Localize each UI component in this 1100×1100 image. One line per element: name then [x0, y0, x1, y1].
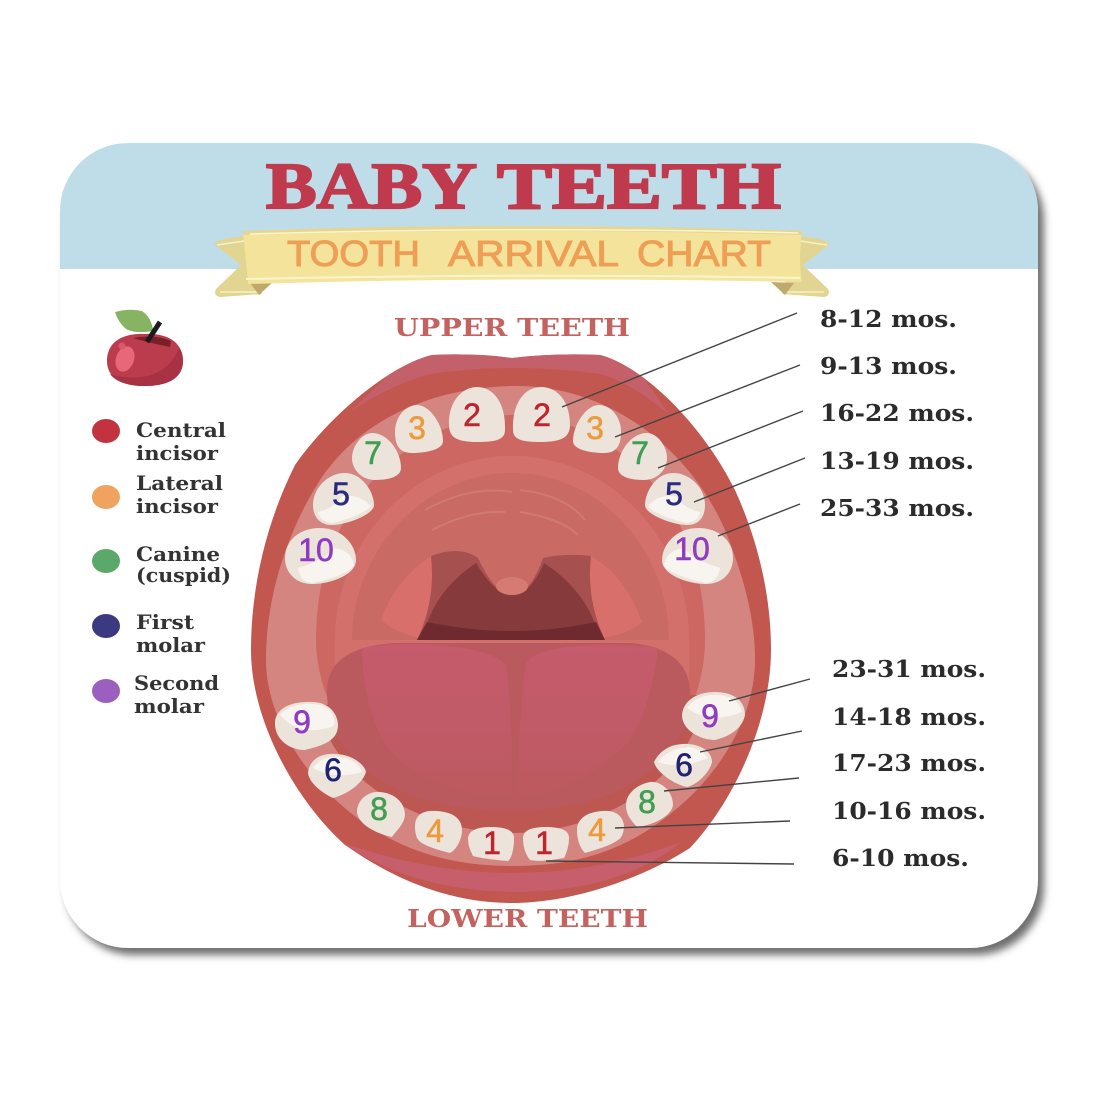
tooth 1 lower right: 1 [535, 825, 553, 861]
tooth 5 upper right [645, 473, 705, 525]
tooth 8 lower left: 8 [370, 791, 388, 827]
tooth 6 lower right: 6 [675, 747, 693, 783]
ribbon banner [214, 226, 830, 297]
legend: canine: Canine [136, 542, 220, 566]
mouse pad panel [60, 143, 1038, 948]
title: TEETH [497, 150, 781, 223]
ribbon subtitle: ARRIVAL [448, 233, 619, 274]
lower age labels: 17-23 mos. [832, 750, 986, 777]
legend: second molar [92, 671, 219, 718]
gums [266, 386, 755, 866]
lower age labels: 23-31 mos. [832, 656, 986, 683]
palate ring [335, 456, 689, 720]
tooth 10 upper left: 10 [298, 532, 334, 568]
left tonsil [381, 556, 436, 640]
lips [251, 354, 771, 903]
upper teeth [285, 387, 733, 584]
upper age labels: 16-22 mos. [820, 400, 974, 427]
lower age labels: 14-18 mos. [832, 704, 986, 731]
tooth 2 upper left [449, 387, 505, 442]
legend: lateral incisor [92, 471, 223, 518]
throat [417, 551, 605, 640]
legend: central incisor: incisor [136, 441, 218, 465]
tooth 3 upper left: 3 [408, 410, 426, 446]
tooth 7 upper right [618, 433, 667, 480]
upper age labels: 8-12 mos. [820, 306, 957, 333]
heading: lower teeth: LOWER TEETH [407, 904, 648, 933]
tooth 5 upper left [313, 473, 374, 525]
tooth 4 lower right [577, 811, 624, 853]
mouse pad shadow [66, 152, 1044, 955]
icon: apple [107, 310, 183, 386]
tooth 3 upper right [573, 405, 621, 453]
upper age labels [820, 306, 974, 522]
legend: central incisor [92, 418, 226, 465]
heading: upper teeth: UPPER TEETH [394, 313, 630, 342]
tooth 7 upper left [352, 433, 401, 480]
upper age labels: 9-13 mos. [820, 353, 957, 380]
tooth 9 lower right [682, 692, 745, 740]
tooth 1 lower left [468, 825, 514, 861]
tooth 1 lower right [523, 825, 569, 861]
upper age labels: 25-33 mos. [820, 495, 974, 522]
tooth 4 lower right: 4 [588, 812, 606, 848]
tooth 5 upper left: 5 [332, 476, 350, 512]
ribbon main band [243, 227, 802, 284]
tooth 3 upper left [395, 405, 443, 453]
legend: first molar: First [136, 610, 195, 634]
upper lip highlight [350, 354, 670, 414]
tooth 8 lower right [626, 782, 673, 827]
tooth 7 upper left: 7 [364, 435, 382, 471]
tooth 4 lower left: 4 [426, 813, 444, 849]
tooth 1 lower left: 1 [483, 825, 501, 861]
tooth 6 lower left [308, 752, 366, 798]
tooth 9 lower left: 9 [293, 704, 311, 740]
legend: canine: (cuspid) [136, 563, 231, 587]
tooth 6 lower right [654, 744, 712, 787]
mouth floor [320, 695, 704, 833]
tooth 9 lower right: 9 [701, 698, 719, 734]
tooth 2 upper right: 2 [533, 397, 551, 433]
ribbon subtitle: TOOTH [287, 233, 420, 274]
inner palate [352, 473, 669, 640]
legend: lateral incisor: Lateral [136, 471, 223, 495]
legend: second molar: Second [134, 671, 219, 695]
lower age labels: 10-16 mos. [832, 798, 986, 825]
lower teeth [275, 692, 745, 861]
tooth 2 upper right [513, 387, 570, 442]
tooth 2 upper left: 2 [463, 397, 481, 433]
legend: first molar: molar [136, 633, 205, 657]
tooth 8 lower right: 8 [638, 784, 656, 820]
tooth 9 lower left [275, 702, 338, 750]
upper age labels: 13-19 mos. [820, 448, 974, 475]
mouth illustration [251, 345, 771, 903]
tooth 5 upper right: 5 [665, 476, 683, 512]
tooth 10 upper right: 10 [674, 531, 710, 567]
tooth 6 lower left: 6 [324, 752, 342, 788]
title [266, 150, 781, 223]
tooth 8 lower left [357, 791, 405, 837]
tooth 3 upper right: 3 [586, 410, 604, 446]
legend: canine [92, 542, 231, 587]
tooth 4 lower left [415, 811, 462, 853]
legend: second molar: molar [134, 694, 204, 718]
legend: lateral incisor: incisor [136, 494, 218, 518]
ribbon subtitle: CHART [637, 233, 771, 274]
right tonsil [586, 556, 642, 640]
leader lines [546, 313, 810, 864]
tooth 10 upper right [662, 528, 733, 584]
ribbon left tail [214, 236, 262, 297]
palate mid ring [316, 415, 705, 830]
uvula [496, 577, 528, 595]
title: BABY [266, 150, 477, 223]
tongue [327, 643, 690, 810]
ribbon subtitle [287, 233, 771, 274]
lower age labels: 6-10 mos. [832, 845, 969, 872]
legend: first molar [92, 610, 205, 657]
lower lip highlight [343, 842, 681, 892]
legend: central incisor: Central [136, 418, 226, 442]
ribbon right tail [782, 236, 830, 297]
lower age labels [832, 656, 986, 872]
tooth 7 upper right: 7 [631, 435, 649, 471]
tooth 10 upper left [285, 528, 356, 584]
legend [92, 418, 231, 718]
